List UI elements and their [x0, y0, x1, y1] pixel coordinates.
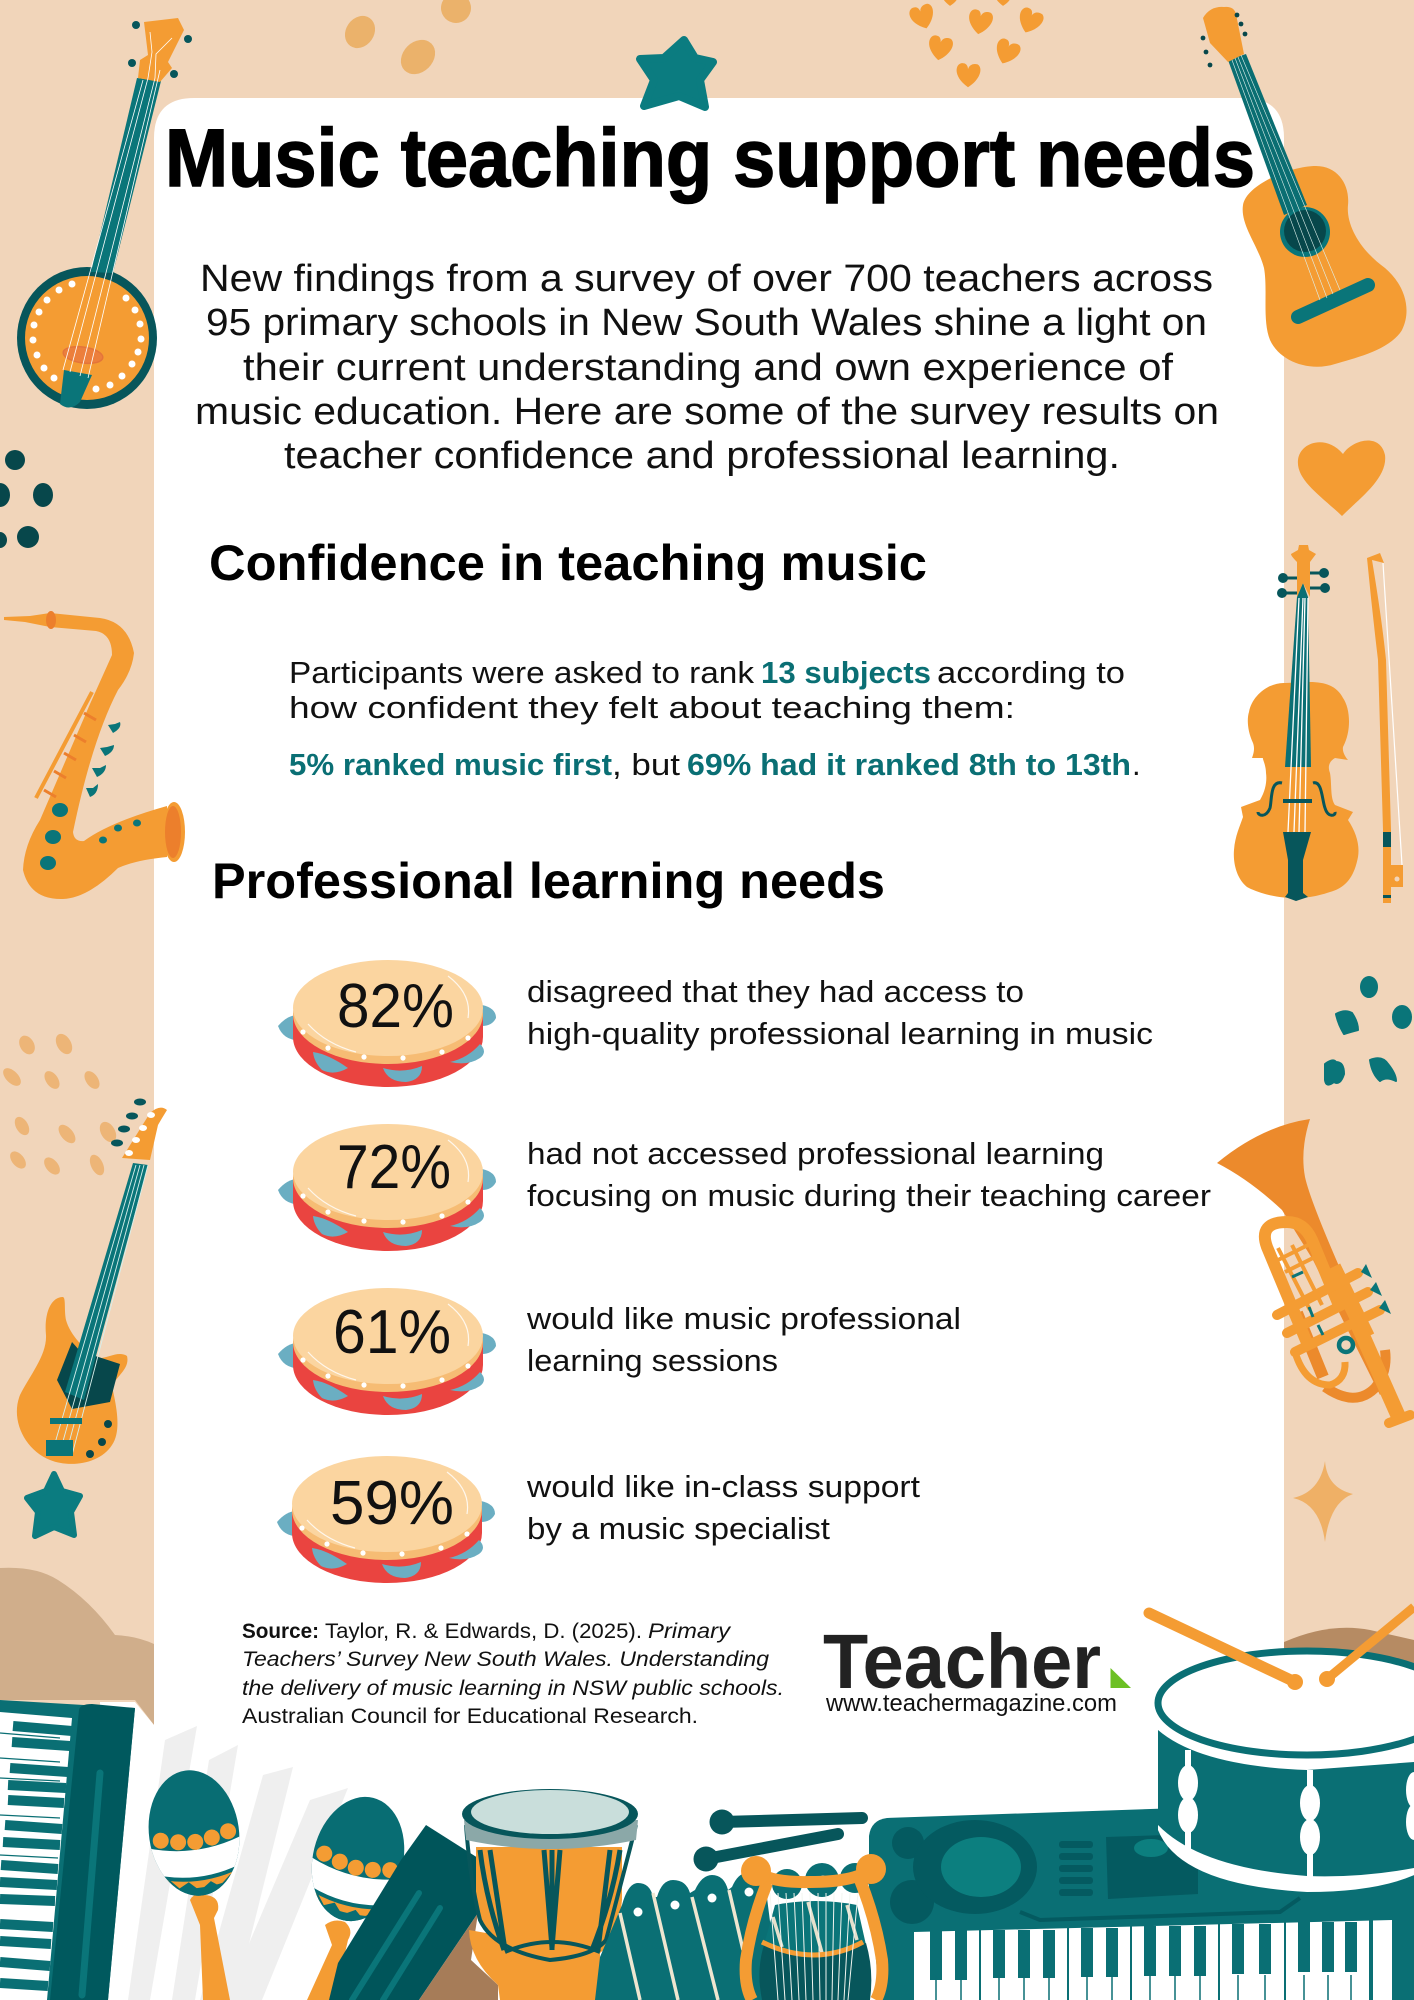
icon: keyboard: [869, 1800, 1414, 2000]
confidence paragraph: according to: [937, 655, 1125, 690]
icon: dark teal book shape: [329, 1825, 498, 2000]
stat row: 72%: had not accessed professional learning: [527, 1136, 1104, 1171]
stat row: 82%: 82%: [337, 972, 454, 1041]
stat row: 59%: by a music specialist: [527, 1511, 830, 1546]
source citation: [242, 1620, 784, 1728]
icon: left maraca: [136, 1764, 253, 2000]
intro paragraph: music education. Here are some of the survey results on: [195, 391, 1219, 433]
source citation: Taylor, R. & Edwards, D. (2025).: [325, 1620, 642, 1643]
icon: snare drum with sticks: [1149, 1607, 1414, 1892]
white content panel: [154, 98, 1284, 2000]
confidence paragraph: [289, 655, 1141, 782]
stat row: 82%: disagreed that they had access to: [527, 974, 1024, 1009]
icon: teal star top: [640, 40, 713, 107]
icon: xylophone: [595, 1873, 780, 2000]
brown hill right: [1284, 1628, 1414, 1740]
icon: teal star left: [27, 1474, 80, 1536]
intro paragraph: their current understanding and own experience of: [243, 347, 1173, 389]
confidence paragraph: 13 subjects: [761, 655, 931, 690]
icon: heart right: [1298, 441, 1385, 516]
confidence paragraph: .: [1132, 747, 1141, 782]
icon: banjo: [17, 18, 192, 409]
decorative teal blobs right: [1325, 977, 1411, 1085]
confidence paragraph: 5% ranked music first: [289, 747, 612, 782]
tan hill left: [0, 1568, 154, 1725]
icon: trumpet: [1217, 1119, 1410, 1423]
source citation: Australian Council for Educational Research.: [242, 1705, 698, 1728]
confidence paragraph: 69% had it ranked 8th to 13th: [687, 747, 1131, 782]
intro paragraph: 95 primary schools in New South Wales shine a light on: [206, 302, 1207, 344]
stat row: 72%: focusing on music during their teaching career: [527, 1178, 1211, 1213]
icon: violin bow: [1367, 553, 1403, 903]
intro paragraph: New findings from a survey of over 700 teachers across: [200, 258, 1213, 300]
icon: accordion: [0, 1700, 135, 2000]
stat row: 82%: [278, 960, 1153, 1087]
decorative hearts top: [908, 0, 1045, 87]
stat row: 82%: high-quality professional learning in music: [527, 1016, 1153, 1051]
Teacher logo: www.teachermagazine.com: [825, 1690, 1117, 1717]
white gap beside accordion: [100, 1702, 154, 2000]
intro paragraph: [195, 258, 1219, 477]
source citation: Teachers’ Survey New South Wales. Understanding: [242, 1648, 769, 1671]
stat row: 61%: learning sessions: [527, 1343, 778, 1378]
icon: right maraca: [293, 1786, 422, 2000]
stat row: 61%: would like music professional: [526, 1301, 961, 1336]
stat row: 61%: [278, 1288, 961, 1415]
stat row: 59%: 59%: [330, 1469, 454, 1538]
grey stripes bottom left: [128, 1726, 348, 2000]
stat row: 61%: 61%: [333, 1298, 451, 1367]
confidence paragraph: Participants were asked to rank: [289, 655, 755, 690]
decorative ovals top: [339, 0, 477, 81]
source citation: Primary: [648, 1620, 732, 1643]
decorative ovals left: [0, 1031, 120, 1178]
source citation: the delivery of music learning in NSW public schools.: [242, 1677, 784, 1700]
intro paragraph: teacher confidence and professional learning.: [284, 435, 1120, 477]
stat row: 72%: 72%: [337, 1133, 451, 1202]
icon: saxophone: [4, 611, 185, 899]
icon: lyre: [741, 1854, 886, 2000]
heading: professional learning: Professional learning needs: [212, 853, 885, 909]
Teacher logo: Teacher: [823, 1619, 1101, 1705]
confidence paragraph: , but: [612, 747, 680, 782]
icon: mallets: [694, 1810, 862, 1872]
confidence paragraph: how confident they felt about teaching them:: [289, 690, 1015, 725]
icon: djembe drum: [462, 1789, 638, 2000]
icon: sparkle: [1293, 1461, 1353, 1542]
stat row: 59%: [277, 1456, 920, 1583]
icon: acoustic guitar: [1201, 7, 1407, 367]
icon: violin: [1234, 545, 1359, 901]
icon: bass guitar: [17, 1098, 167, 1464]
stat row: 59%: would like in-class support: [526, 1469, 920, 1504]
source citation: Source:: [242, 1620, 319, 1643]
stat row: 72%: [278, 1124, 1211, 1251]
decorative dark dots left: [0, 450, 53, 548]
main title: Music teaching support needs: [165, 113, 1255, 204]
heading: confidence: Confidence in teaching music: [209, 535, 927, 591]
